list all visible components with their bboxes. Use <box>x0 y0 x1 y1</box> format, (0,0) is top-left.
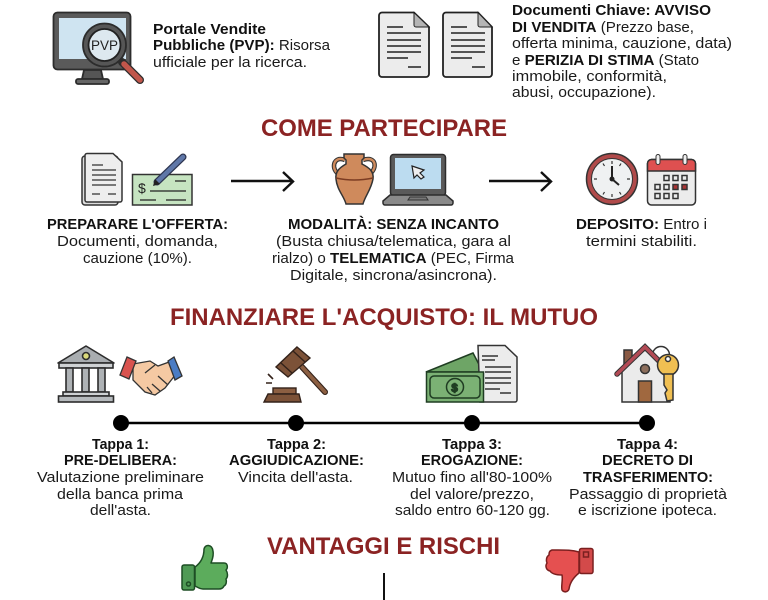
text: preparare l'offerta: Documenti, domanda, <box>57 233 218 250</box>
icon: handshake <box>120 357 182 395</box>
icon: money and document <box>426 346 517 402</box>
text: Documenti Chiave: DI VENDITA (Prezzo base, <box>512 19 694 36</box>
text: tappa 4: Tappa 4: <box>617 436 678 453</box>
text: tappa 1: della banca prima <box>57 486 184 503</box>
text: tappa 1: dell'asta. <box>90 502 151 519</box>
text: Documenti Chiave: e PERIZIA DI STIMA (Stato <box>512 52 699 69</box>
icon: thumbs down <box>546 548 593 592</box>
text: tappa 3: del valore/prezzo, <box>410 486 534 503</box>
text: preparare l'offerta: cauzione (10%). <box>83 250 192 267</box>
text: deposito: termini stabiliti. <box>586 233 697 250</box>
text: modalità: (Busta chiusa/telematica, gara al <box>276 233 511 250</box>
text: Documenti Chiave: offerta minima, cauzione, data) <box>512 35 732 52</box>
timeline <box>113 415 655 431</box>
heading: finanziare l'acquisto: FINANZIARE L'ACQUISTO: IL MUTUO <box>170 304 598 331</box>
icon: gavel <box>264 347 325 402</box>
text: tappa 1: Valutazione preliminare <box>37 469 204 486</box>
text: tappa 3: saldo entro 60-120 gg. <box>395 502 550 519</box>
icon: key document 1 <box>379 12 429 77</box>
icon: monitor with PVP magnifier: PVP <box>91 37 118 53</box>
text: tappa 1 <box>37 436 204 519</box>
icon: monitor with PVP magnifier <box>54 12 140 84</box>
text: tappa 3 <box>392 436 552 519</box>
arrow: step 2 to step 3 <box>489 172 551 191</box>
text: Documenti Chiave: immobile, conformità, <box>512 68 667 85</box>
text: tappa 1: PRE-DELIBERA: <box>64 452 177 469</box>
text: modalità: MODALITÀ: SENZA INCANTO <box>288 216 499 233</box>
text: tappa 3: EROGAZIONE: <box>421 452 523 469</box>
text: deposito: DEPOSITO: Entro i <box>576 216 707 233</box>
icon: amphora and laptop <box>334 154 453 205</box>
icon: clock and calendar <box>586 154 696 205</box>
text: tappa 3: Tappa 3: <box>442 436 502 453</box>
text: tappa 4 <box>569 436 728 519</box>
heading: vantaggi e rischi: VANTAGGI E RISCHI <box>267 533 500 560</box>
section: how to participate <box>47 154 707 284</box>
heading: come partecipare: COME PARTECIPARE <box>261 115 507 142</box>
text: tappa 2: Tappa 2: <box>267 436 326 453</box>
text: tappa 2 <box>229 436 364 486</box>
text: Documenti Chiave <box>512 2 732 101</box>
text: Portale Vendite Pubbliche: Pubbliche (PVP): Risorsa <box>153 37 331 54</box>
text: tappa 4: TRASFERIMENTO: <box>583 469 713 486</box>
text: Portale Vendite Pubbliche: ufficiale per la ricerca. <box>153 54 307 71</box>
icon: bank <box>58 346 114 402</box>
icon: money and document: $ <box>452 382 458 394</box>
section: research resources <box>54 2 732 101</box>
icon: thumbs up <box>182 545 228 590</box>
text: modalità: Digitale, sincrona/asincrona). <box>290 267 497 284</box>
divider: advantages and risks <box>383 573 385 600</box>
text: preparare l'offerta: PREPARARE L'OFFERTA: <box>47 216 228 233</box>
text: tappa 1: Tappa 1: <box>92 436 149 453</box>
arrow: step 1 to step 2 <box>231 172 293 191</box>
text: deposito <box>576 216 707 250</box>
text: tappa 4: Passaggio di proprietà <box>569 486 728 503</box>
icon: house and key <box>617 346 678 402</box>
icon: key document 2 <box>443 12 492 77</box>
text: tappa 3: Mutuo fino all'80-100% <box>392 469 552 486</box>
text: Portale Vendite Pubbliche: Portale Vendite <box>153 21 266 38</box>
text: tappa 4: DECRETO DI <box>602 452 693 469</box>
text: modalità: rialzo) o TELEMATICA (PEC, Firma <box>272 250 515 267</box>
text: Documenti Chiave: Documenti Chiave: AVVISO <box>512 2 711 19</box>
text: tappa 2: Vincita dell'asta. <box>238 469 353 486</box>
icon: documents and cheque: $ <box>138 180 146 196</box>
text: Portale Vendite Pubbliche <box>153 21 331 71</box>
text: preparare l'offerta <box>47 216 228 267</box>
text: Documenti Chiave: abusi, occupazione). <box>512 84 656 101</box>
section: mortgage timeline <box>37 346 728 519</box>
text: tappa 4: e iscrizione ipoteca. <box>578 502 717 519</box>
text: modalità <box>272 216 515 284</box>
text: tappa 2: AGGIUDICAZIONE: <box>229 452 364 469</box>
icon: documents and cheque <box>82 154 192 205</box>
